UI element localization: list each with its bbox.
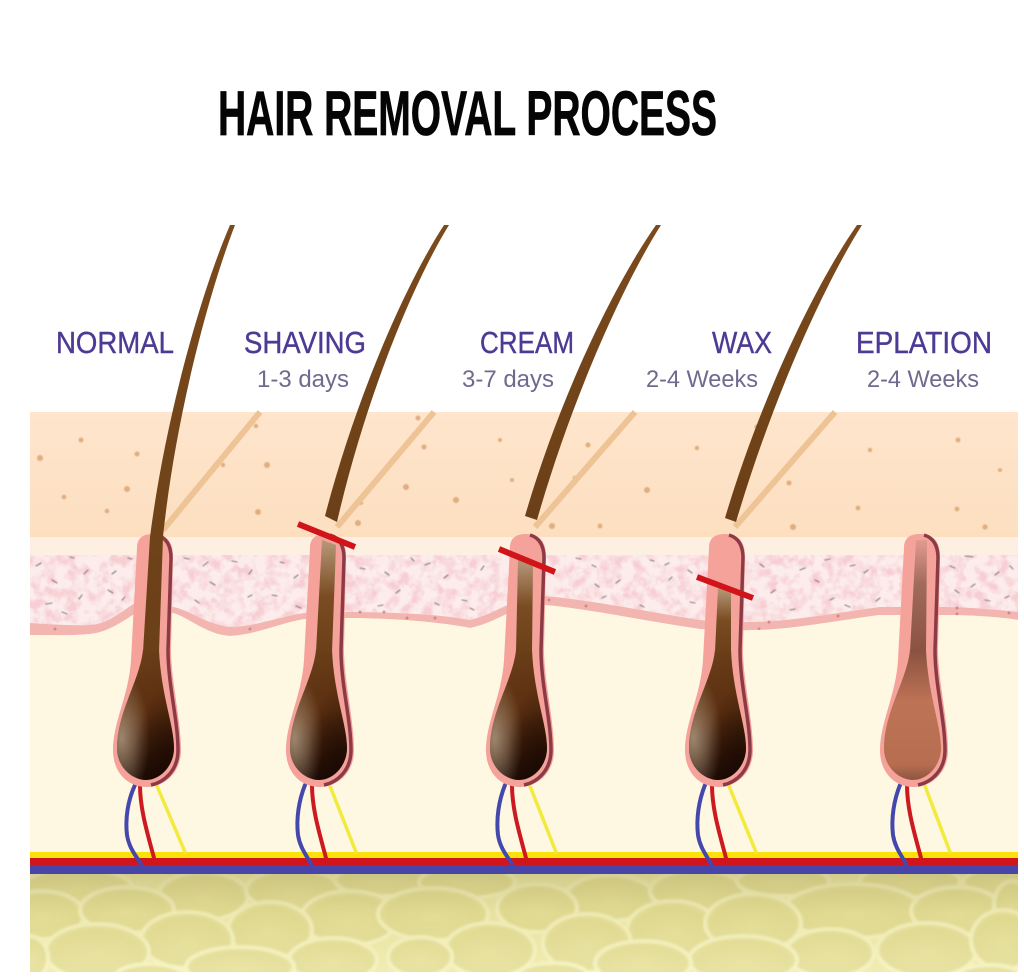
hair shaft xyxy=(143,225,235,652)
follicle 3: cream xyxy=(486,225,661,864)
nerve and vessel roots xyxy=(697,785,756,864)
hair above skin xyxy=(725,225,862,522)
title: HAIR REMOVAL PROCESS xyxy=(218,79,717,149)
hair stump in follicle xyxy=(715,588,731,652)
follicle sheath xyxy=(486,534,554,787)
hair stump in follicle xyxy=(516,560,533,652)
cut line xyxy=(298,524,355,547)
follicle sheath xyxy=(685,534,753,787)
label: shaving duration: 1-3 days xyxy=(257,366,349,393)
nerve and vessel roots xyxy=(297,785,356,864)
tan hair xyxy=(163,412,260,530)
blood vessels and nerve band xyxy=(30,852,1018,874)
label: cream: CREAM xyxy=(480,325,574,360)
follicle sheath xyxy=(286,534,354,787)
label: shaving: SHAVING xyxy=(244,325,366,360)
cream subcutis layer xyxy=(30,605,1018,852)
dermis texture layer xyxy=(30,555,1018,640)
cut line xyxy=(697,577,753,598)
tan hair xyxy=(735,412,835,527)
hair above skin xyxy=(325,225,449,522)
label: wax: WAX xyxy=(712,325,772,360)
hair above skin xyxy=(525,225,661,520)
hair stump in follicle xyxy=(316,540,336,652)
label: wax duration: 2-4 Weeks xyxy=(646,366,758,393)
nerve and vessel roots xyxy=(126,785,185,864)
follicle sheath xyxy=(880,534,948,787)
tan hair xyxy=(337,412,434,527)
fat cell layer xyxy=(30,874,1018,972)
follicle 1: normal xyxy=(113,225,260,864)
nerve and vessel roots xyxy=(892,785,950,864)
nerve and vessel roots xyxy=(497,785,556,864)
label: cream duration: 3-7 days xyxy=(462,366,554,393)
tan hair xyxy=(535,412,635,527)
stage labels xyxy=(56,325,992,393)
follicle 5: epilation xyxy=(880,534,950,864)
label: eplation duration: 2-4 Weeks xyxy=(867,366,979,393)
follicle 4: wax xyxy=(685,225,862,864)
epidermis band with pigment dots xyxy=(30,412,1018,555)
cut line xyxy=(499,549,555,572)
follicle 2: shaving xyxy=(286,225,449,864)
label: eplation: EPLATION xyxy=(856,325,992,360)
label: normal: NORMAL xyxy=(56,325,174,360)
empty hair channel xyxy=(910,540,927,652)
follicle sheath xyxy=(113,534,181,787)
